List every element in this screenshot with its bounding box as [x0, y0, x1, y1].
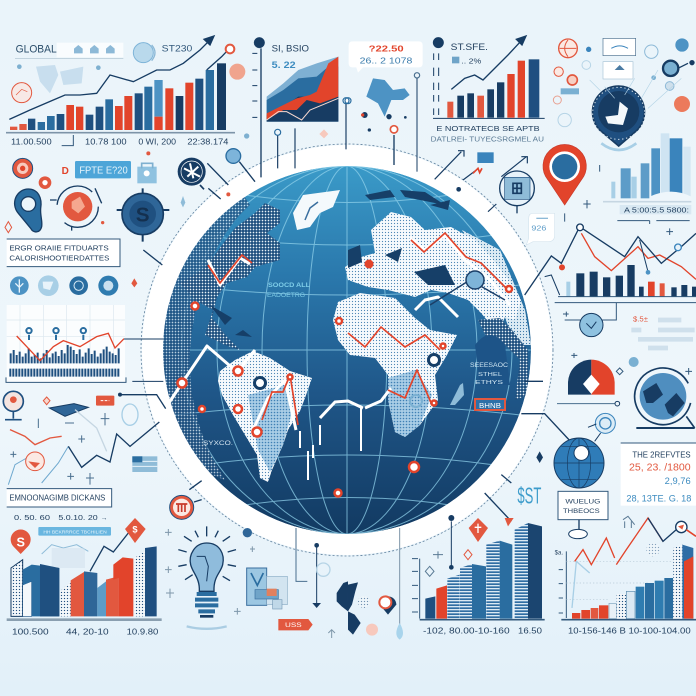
connectors [485, 475, 511, 521]
line chart: red [10, 430, 62, 445]
panel: figures: 28, 13TE. G. 18 [626, 493, 691, 503]
navy line [525, 227, 696, 295]
sign: wuelug thbeocs: THBEOCS [563, 508, 600, 515]
faint world map [36, 65, 83, 93]
top middle and right elements [345, 36, 696, 348]
icon: red ball [50, 186, 102, 231]
chart: building bars [412, 523, 545, 636]
axis numbers: 10.9.80 [127, 627, 159, 636]
short connector lines [143, 163, 228, 265]
icon: blue circle [580, 313, 603, 337]
number labels: → [101, 515, 107, 522]
label: st230 [133, 43, 192, 63]
sign: wuelug thbeocs: WUELUG [565, 498, 600, 505]
label: st230: ST230 [162, 44, 192, 54]
axis [6, 130, 235, 135]
icon: documents [247, 568, 287, 609]
red ring markers [178, 286, 512, 496]
axis text: -102, 80.00-10-160 [423, 627, 510, 636]
faded data table [631, 315, 695, 348]
label: blue tag: D [62, 166, 69, 177]
text box: EMNOONAGIMB DICKANS [9, 494, 105, 503]
icon: red dollar pin [11, 530, 31, 554]
icon: building medallion [500, 171, 534, 213]
red dots [101, 151, 230, 224]
blue drop [181, 196, 185, 207]
labels [272, 44, 309, 70]
icon: small red ring [39, 176, 51, 189]
red arrow tip [505, 518, 514, 526]
network of small icons [553, 38, 695, 127]
continent: madagascar [450, 383, 464, 405]
chart: red line staircase [555, 518, 696, 636]
small dots [17, 64, 249, 139]
blue pill [38, 527, 111, 536]
open navy markers [254, 354, 440, 388]
blue small tag [477, 152, 494, 163]
icon: light bulb [178, 526, 236, 629]
red arrow tag [278, 619, 313, 630]
lower-left icons and charts [3, 391, 348, 638]
map labels: SOOCD ALL [268, 282, 310, 289]
axis values: 22:38.174 [187, 137, 229, 146]
sign: wuelug thbeocs [558, 491, 608, 520]
icon row [10, 275, 137, 296]
arrow line [451, 36, 526, 89]
chart: global top-left bar chart [6, 36, 249, 146]
icon: globe on stand [554, 438, 604, 488]
map labels: EADOETRG [267, 292, 305, 299]
blue pill: HH BEKRRRCE TBCHILIEN [43, 529, 107, 535]
connector: arrow down [312, 543, 321, 608]
axis text: 10-156-146 B 10-100-104.00 [568, 627, 691, 636]
red framed label [475, 399, 505, 410]
icon: red location pin [543, 144, 586, 205]
sparkle [536, 451, 543, 463]
map labels: SEEESAOC [470, 363, 509, 369]
text box: CALORISHOOTIERDATTES [9, 254, 109, 263]
red dots [364, 260, 374, 268]
speech bubble with numbers: ?22.50 [369, 44, 404, 54]
small map west part [337, 581, 348, 611]
white trend lines [165, 235, 510, 432]
icon: blue key pin [15, 189, 42, 232]
caption text: DATLREI- TUYECSRGMEL AU [431, 135, 544, 144]
caption text: E NOTRATECB SE APTB [436, 124, 540, 133]
right line chart [525, 224, 696, 320]
red trend lines [208, 233, 508, 425]
icon: red gem [43, 397, 50, 405]
text box [7, 239, 120, 267]
panel red line [17, 333, 124, 361]
icon: small sphere [243, 528, 252, 537]
icon: magnifier [226, 149, 255, 182]
caption text [431, 124, 544, 144]
dark basin on east rim [475, 335, 510, 385]
icon: banknotes [49, 404, 88, 416]
lens marker [676, 521, 696, 536]
small world map [348, 582, 361, 635]
white spikes [300, 408, 361, 480]
icon: navy hash disc [178, 158, 206, 189]
sign pole [569, 520, 587, 539]
map labels [203, 282, 509, 447]
continent: greenland [293, 190, 340, 230]
small diamonds [5, 222, 12, 233]
sparkles [571, 353, 692, 375]
stacked area [267, 57, 338, 122]
continent: south america [218, 351, 312, 482]
africa shaded south [388, 370, 432, 437]
small sparkles [563, 165, 673, 317]
red outline circle [12, 83, 32, 103]
icon: red ring badge [26, 452, 44, 471]
speech bubble with numbers: 26.. 2 1078 [360, 55, 413, 65]
label: $a. [555, 550, 563, 557]
globe [163, 166, 531, 534]
connector with arrow [118, 393, 166, 409]
number labels: 0. 50. 60 [14, 513, 50, 522]
faint map [366, 78, 410, 117]
red diamond [469, 518, 488, 542]
blue magnifier marker [466, 271, 484, 289]
rising line over bars [90, 533, 128, 571]
icon: red diamond dollar: $ [132, 524, 138, 534]
axis numbers: 44, 20-10 [66, 627, 109, 636]
text box: ERGR ORAIIE FITDUARTS [9, 244, 109, 253]
number labels [14, 513, 107, 522]
caption: bar chart [617, 205, 691, 224]
red tag [96, 396, 114, 406]
connector: elbow [296, 528, 307, 581]
icon: oval [122, 404, 138, 425]
navy trend line [430, 280, 505, 305]
north pole pin [305, 202, 318, 220]
continent: africa [333, 293, 457, 437]
buildings [425, 523, 542, 619]
panel markers [26, 328, 86, 340]
line chart: blue [8, 446, 68, 485]
axis values: 11.00.500 [11, 137, 52, 146]
blue shadow line [572, 561, 590, 608]
continent: caribbean [210, 305, 252, 337]
axis [433, 38, 545, 118]
map labels: ETHYS [475, 380, 504, 386]
speech bubble: 926 [526, 213, 555, 245]
navy line [648, 518, 676, 541]
panel grid [7, 305, 125, 363]
south america shaded side [248, 385, 292, 472]
map markers [178, 202, 512, 496]
baseline [420, 617, 545, 622]
axis [559, 551, 566, 618]
icon: flag [132, 456, 157, 472]
speech bubble with numbers [349, 41, 423, 73]
chart: si bsio area chart [252, 37, 349, 177]
red arrow tag: USS [285, 623, 302, 629]
title: global: GLOBAL [16, 44, 57, 56]
trend line and arrow [9, 36, 227, 119]
arrows [435, 151, 527, 212]
asia northern islands [365, 190, 450, 210]
connector to globe [521, 414, 572, 443]
red line [575, 518, 663, 565]
lower right elements [348, 353, 696, 640]
axis values: 0 WI, 200 [138, 137, 177, 146]
red dash [361, 113, 364, 117]
chart: st.sfe bar chart [433, 36, 545, 118]
icon: desk globe [3, 391, 23, 420]
icon: small globe [627, 360, 696, 433]
axis values: 10.78 100 [85, 137, 127, 146]
baseline [561, 617, 696, 622]
icon: red stamp [170, 481, 202, 519]
red line [581, 233, 696, 279]
text box [7, 489, 112, 507]
faded data table: $.5± [633, 315, 648, 324]
panel: figures: THE 2REFVTES [632, 451, 691, 460]
icon: red target [13, 158, 33, 178]
icon: target [588, 413, 615, 441]
label: blue tag: FPTE E?20 [79, 165, 128, 176]
speech bubble: 926: 926 [531, 224, 546, 233]
map trend lines [165, 233, 510, 480]
bars [10, 63, 226, 130]
continent: eurasia [345, 212, 521, 333]
line chart: navy [68, 422, 159, 467]
baseline [555, 297, 696, 320]
stepped bars [572, 545, 693, 619]
pin connector [448, 515, 454, 570]
axis numbers [12, 627, 159, 636]
axis [412, 559, 420, 619]
bracket [6, 377, 126, 382]
sparkles [165, 529, 335, 638]
pin stems [345, 73, 420, 172]
connector to globe [124, 339, 163, 381]
red soft disc [229, 64, 245, 80]
red sparkle [319, 129, 328, 138]
sparkles [10, 413, 109, 485]
red pin [390, 126, 398, 133]
vertical drop connector [396, 528, 403, 640]
heading: ST.SFE. [451, 42, 488, 52]
line chart: faint [75, 410, 107, 451]
red ring end marker [226, 45, 234, 53]
label: blue tag [62, 161, 131, 178]
faint lines behind bars [42, 545, 88, 568]
panel bars [11, 345, 119, 363]
number labels: 5.0.10. 20 [58, 513, 98, 522]
axis numbers: 100.500 [12, 627, 49, 636]
icon: dollar coin [117, 188, 169, 242]
panel: figures: 2,9,76 [665, 476, 691, 486]
ring [317, 563, 330, 576]
map labels: STHEL [478, 372, 502, 378]
axis with ticks [252, 37, 265, 177]
icon: dollar coin: S [136, 204, 150, 227]
axis text [423, 627, 543, 636]
chart bars [566, 265, 696, 297]
halftone rim [163, 190, 250, 480]
icon: lock [137, 163, 157, 183]
dotted cluster [358, 596, 378, 636]
guide lines [566, 561, 673, 600]
icon: red diamond dollar [125, 518, 146, 543]
icon: navy shield pin [592, 86, 645, 150]
baseline [7, 616, 162, 624]
continent: north america [180, 203, 280, 350]
globe grid lines [163, 166, 531, 534]
globe halo [142, 145, 552, 555]
labels: 5. 22 [272, 60, 296, 70]
continent: asian rim [462, 230, 531, 345]
axis under donut [557, 401, 620, 406]
panel: white line and bar chart [6, 305, 163, 382]
eurasia seas [348, 245, 455, 285]
caption: bar chart: A 5:00:5.5 5800: [624, 206, 689, 215]
line markers [559, 224, 681, 275]
icon: red dollar pin: S [16, 536, 25, 550]
continent: east asia rim [478, 318, 528, 400]
sub label: .. 2% [461, 56, 482, 65]
red squiggle [473, 168, 482, 173]
dashed orbit ring [141, 144, 553, 556]
bars [447, 59, 539, 118]
icon: map pin [379, 596, 396, 615]
labels: SI, BSIO [272, 44, 309, 54]
panel: figures [621, 443, 696, 506]
map labels: SYXCO. [203, 440, 233, 447]
bar buildings [11, 546, 157, 616]
panel: figures: 25, 23. /1800 [629, 463, 691, 474]
black dots [362, 112, 461, 192]
axis text: 16.50 [518, 627, 543, 636]
africa target [410, 395, 422, 407]
axis values [11, 135, 229, 146]
faint dotted cluster [646, 543, 660, 556]
faded bar chart [603, 133, 691, 202]
icons around buildings [425, 516, 635, 576]
pin stems [275, 98, 349, 168]
title: global [15, 43, 123, 58]
row of icons: left [5, 149, 255, 296]
icon: half donut [568, 360, 615, 395]
red framed label: BHNB [479, 403, 501, 410]
dollar glyph: $ST [517, 483, 541, 509]
